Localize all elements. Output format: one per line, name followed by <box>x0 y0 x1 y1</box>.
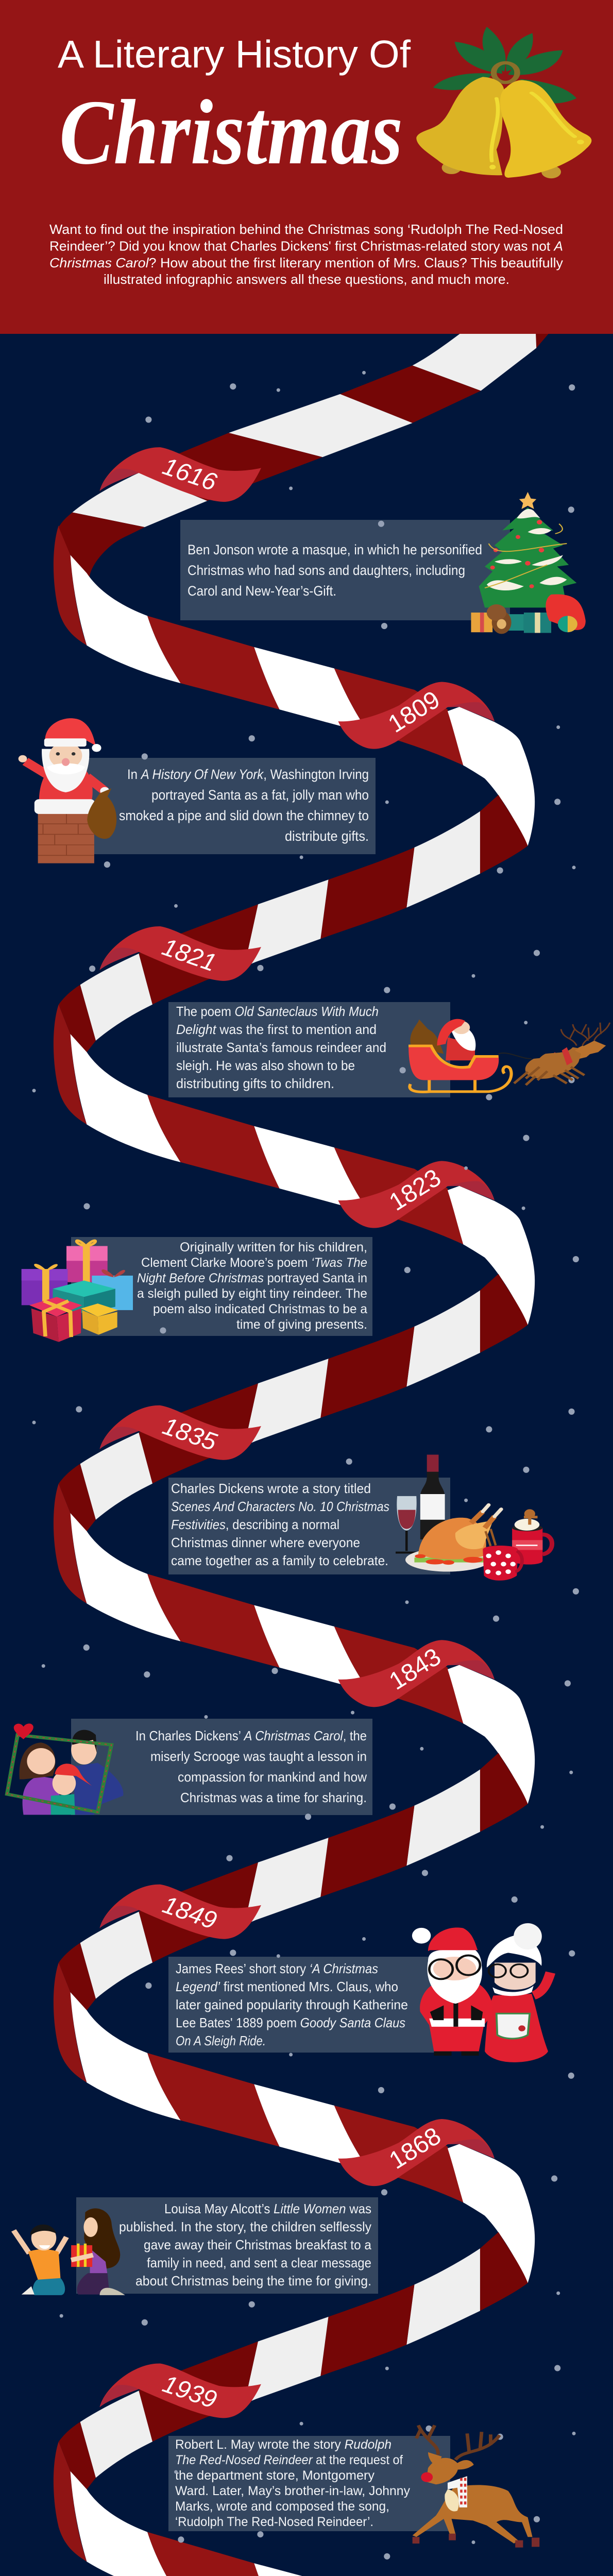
panel: 1821 Old Santeclaus <box>168 1002 450 1097</box>
panel: 1823 Clement Clarke Moore: Originally written for his children, <box>180 1240 367 1255</box>
ribbon: 1849 to 1868 segment: 1868 <box>385 2122 446 2175</box>
panel: 1821 Old Santeclaus: sleigh. He was also shown to be <box>176 1058 355 1073</box>
panel: 1835 Charles Dickens Christmas Festivities: Christmas dinner where everyone <box>171 1535 360 1550</box>
icon: children exchanging a gift <box>14 2208 125 2295</box>
panel: 1616 Ben Jonson <box>180 520 510 620</box>
panel: 1809 Washington Irving <box>74 758 376 854</box>
icon: header bells <box>416 27 591 178</box>
panel: 1821 Old Santeclaus: illustrate Santa’s famous reindeer and <box>176 1040 386 1055</box>
panel: 1809 Washington Irving: smoked a pipe and slid down the chimney to <box>119 808 369 823</box>
icon: stack of gifts <box>22 1241 133 1342</box>
panel: 1939 Rudolph: Ward. Later, May’s brother-in-law, Johnny <box>175 2484 410 2498</box>
panel: 1868 Little Women: gave away their Christmas breakfast to a <box>144 2237 371 2252</box>
panel: 1939 Rudolph: Marks, wrote and composed the song, <box>175 2499 389 2514</box>
panel: 1835 Charles Dickens Christmas Festivities: Scenes And Characters No. 10 Christmas <box>171 1499 389 1514</box>
icon: family in a wreath frame <box>7 1723 123 1815</box>
panel: 1868 Little Women: Louisa May Alcott’s Little Women was <box>164 2201 371 2216</box>
ribbon: 1835 to 1843 segment <box>54 1274 535 1804</box>
header panel <box>0 0 613 334</box>
panel: 1809 Washington Irving: distribute gifts. <box>285 828 369 844</box>
panel: 1849 James Rees: later gained popularity through Katherine <box>176 1997 408 2012</box>
panel: 1616 Ben Jonson: Christmas who had sons and daughters, including <box>188 563 465 578</box>
panel: 1823 Clement Clarke Moore: Clement Clarke Moore’s poem ‘Twas The <box>141 1256 367 1270</box>
panel: 1823 Clement Clarke Moore <box>71 1237 372 1336</box>
panel: 1939 Rudolph: The Red-Nosed Reindeer at the request of <box>175 2453 403 2467</box>
panel: 1843 A Christmas Carol: Christmas was a time for sharing. <box>180 1790 367 1805</box>
panel: 1843 A Christmas Carol: miserly Scrooge was taught a lesson in <box>150 1749 367 1764</box>
panel: 1823 Clement Clarke Moore: time of giving presents. <box>236 1317 367 1332</box>
title: Christmas: Christmas <box>59 81 403 183</box>
panel: 1823 Clement Clarke Moore: poem also indicated Christmas to be a <box>153 1302 367 1316</box>
ribbon: 1821 to 1823 segment: 1821 <box>159 934 219 977</box>
panel: 1939 Rudolph: ‘Rudolph The Red-Nosed Reindeer’. <box>175 2515 373 2529</box>
panel: 1843 A Christmas Carol: compassion for mankind and how <box>178 1769 367 1785</box>
panel: 1868 Little Women: published. In the story, the children selflessly <box>119 2219 371 2234</box>
icon: Christmas tree with gifts <box>471 492 586 634</box>
icon: Santa and Mrs. Claus <box>412 1923 551 2062</box>
intro paragraph: Reindeer’? Did you know that Charles Dickens' first Christmas-related story was not A <box>49 238 563 253</box>
panel: 1849 James Rees <box>168 1957 450 2053</box>
panel: 1835 Charles Dickens Christmas Festivities <box>168 1478 450 1574</box>
intro paragraph <box>49 222 563 287</box>
panel: 1835 Charles Dickens Christmas Festivities: Festivities, describing a normal <box>171 1517 339 1532</box>
ribbon: 1821 to 1823 segment <box>54 795 535 1325</box>
panel: 1821 Old Santeclaus: Delight was the first to mention and <box>176 1022 377 1037</box>
title: A Literary History Of: A Literary History Of <box>58 32 411 76</box>
panel: 1616 Ben Jonson: Ben Jonson wrote a masque, in which he personified <box>188 542 482 557</box>
ribbon: 1835 to 1843 segment: 1843 <box>385 1643 446 1696</box>
ribbon: 1835 to 1843 segment: 1835 <box>159 1413 220 1456</box>
panel: 1849 James Rees: On A Sleigh Ride. <box>176 2033 266 2048</box>
ribbon: 1939 to 1985 segment: 1939 <box>159 2370 220 2414</box>
intro paragraph: Christmas Carol? How about the first literary mention of Mrs. Claus? This beautifully <box>49 255 563 270</box>
panel: 1868 Little Women: family in need, and sent a clear message <box>147 2255 371 2270</box>
intro paragraph: illustrated infographic answers all these questions, and much more. <box>104 272 509 287</box>
panel: 1939 Rudolph <box>168 2436 450 2531</box>
panel: 1835 Charles Dickens Christmas Festivities: came together as a family to celebrate. <box>171 1553 388 1568</box>
panel: 1835 Charles Dickens Christmas Festivities: Charles Dickens wrote a story titled <box>171 1481 371 1496</box>
ribbon: 1616 to 1809 segment <box>54 328 553 846</box>
ribbon: 1849 to 1868 segment: 1849 <box>159 1891 220 1935</box>
panel: 1823 Clement Clarke Moore: Night Before Christmas portrayed Santa in <box>137 1271 367 1285</box>
panel: 1809 Washington Irving: In A History Of New York, Washington Irving <box>127 767 369 782</box>
panel: 1843 A Christmas Carol: In Charles Dickens’ A Christmas Carol, the <box>135 1728 367 1743</box>
icon: Santa's sleigh and reindeer <box>408 1019 610 1092</box>
ribbon: 1849 to 1868 segment <box>54 1753 535 2283</box>
ribbon: 1821 to 1823 segment: 1823 <box>385 1164 446 1216</box>
ribbon: 1616 to 1809 segment: 1616 <box>159 453 220 497</box>
panel: 1821 Old Santeclaus: The poem Old Santeclaus With Much <box>176 1004 379 1019</box>
icon: Rudolph the reindeer <box>413 2425 539 2548</box>
panel: 1939 Rudolph: the department store, Montgomery <box>175 2468 374 2483</box>
icon: Santa in chimney <box>19 718 116 863</box>
panel: 1809 Washington Irving: portrayed Santa as a fat, jolly man who <box>151 787 369 803</box>
panel: 1849 James Rees: Lee Bates' 1889 poem Goody Santa Claus <box>176 2015 405 2030</box>
panel: 1849 James Rees: Legend’ first mentioned Mrs. Claus, who <box>176 1979 398 1994</box>
panel: 1868 Little Women: about Christmas being the time for giving. <box>135 2273 371 2289</box>
snowfall dots <box>25 371 579 2576</box>
ribbon: 1616 to 1809 segment: 1809 <box>384 686 445 738</box>
panel: 1849 James Rees: James Rees’ short story ‘A Christmas <box>176 1961 378 1976</box>
ribbon: 1939 to 1985 segment <box>54 2232 535 2576</box>
panel: 1823 Clement Clarke Moore: a sleigh pulled by eight tiny reindeer. The <box>137 1286 367 1301</box>
intro paragraph: Want to find out the inspiration behind the Christmas song ‘Rudolph The Red-Nosed <box>49 222 563 237</box>
panel: 1616 Ben Jonson: Carol and New-Year’s-Gift. <box>188 583 336 599</box>
panel: 1868 Little Women <box>76 2197 378 2294</box>
panel: 1939 Rudolph: Robert L. May wrote the story Rudolph <box>175 2437 391 2452</box>
panel: 1821 Old Santeclaus: distributing gifts to children. <box>176 1076 334 1091</box>
panel: 1843 A Christmas Carol <box>71 1719 372 1815</box>
icon: Christmas dinner with wine and mugs <box>396 1454 552 1581</box>
